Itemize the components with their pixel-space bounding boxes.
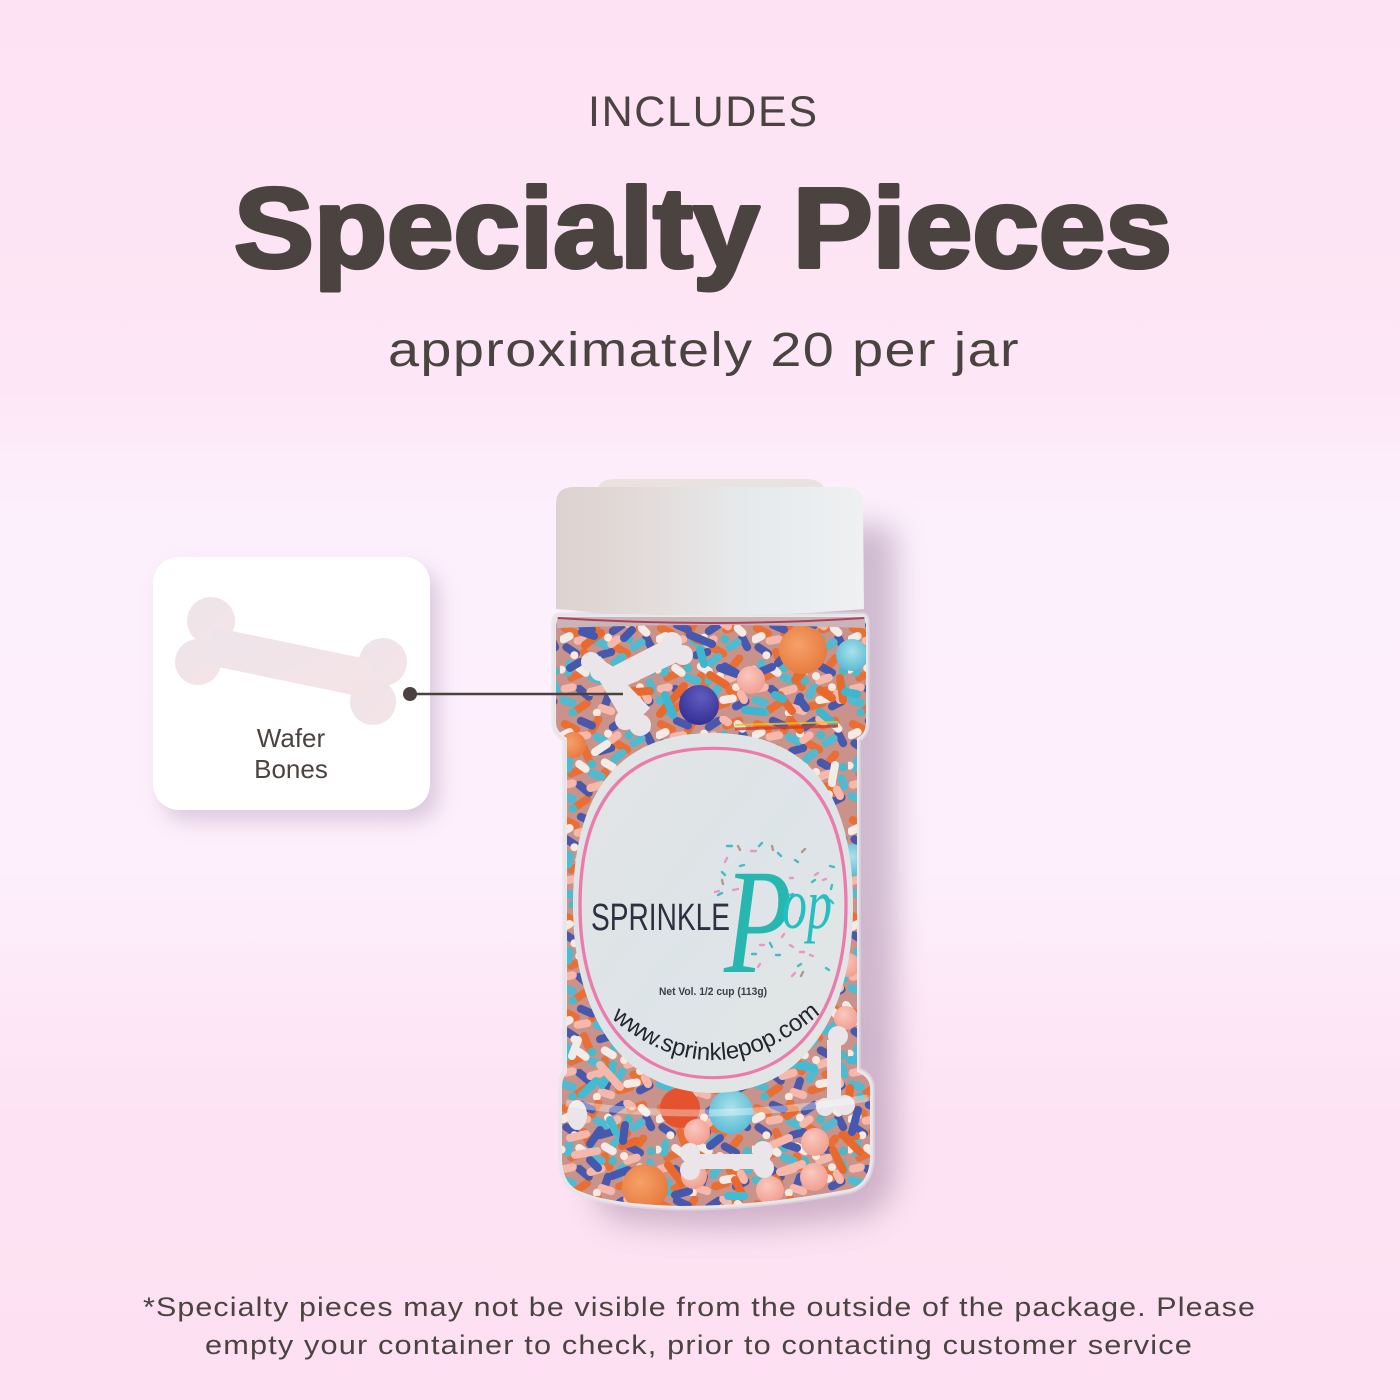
footnote: empty your container to check, prior to contacting customer service	[205, 1330, 1193, 1360]
card label: Bones	[254, 754, 328, 784]
net volume: Net Vol. 1/2 cup (113g)	[659, 986, 767, 998]
footnote	[143, 1292, 1256, 1360]
eyebrow heading: INCLUDES	[588, 88, 817, 136]
subtitle: approximately 20 per jar	[388, 324, 1020, 377]
label pink ring	[580, 748, 846, 1078]
top window accents	[585, 633, 843, 730]
logo script: Pop: op	[782, 864, 832, 944]
neck rim	[557, 617, 865, 628]
callout dot and leader line	[403, 687, 623, 701]
cap	[556, 487, 864, 616]
label: www.sprinklepop.com	[614, 1006, 820, 1062]
bottom accents	[622, 1088, 860, 1196]
callout card: wafer bones	[153, 557, 439, 821]
jar	[551, 479, 911, 1242]
top ring of cap	[597, 479, 825, 490]
side accents	[572, 744, 854, 1056]
bones in jar	[567, 632, 855, 1180]
label confetti	[718, 843, 834, 970]
website	[611, 1012, 822, 1060]
jar shadow	[590, 525, 896, 1228]
card label: Wafer	[257, 723, 326, 753]
label	[573, 733, 853, 1093]
candy spheres	[779, 626, 827, 674]
icon: wafer bone	[175, 597, 407, 725]
logo wordmark: SPRINKLE: SPRINKLE	[591, 897, 730, 939]
logo script: Pop: P	[723, 839, 792, 1005]
glass body	[553, 614, 873, 1209]
main title: Specialty Pieces	[234, 165, 1172, 291]
glass frame	[553, 614, 873, 1209]
glass glare	[566, 1098, 868, 1113]
footnote: *Specialty pieces may not be visible from the outside of the package. Please	[143, 1292, 1256, 1322]
sprinkles fill	[550, 610, 880, 1210]
